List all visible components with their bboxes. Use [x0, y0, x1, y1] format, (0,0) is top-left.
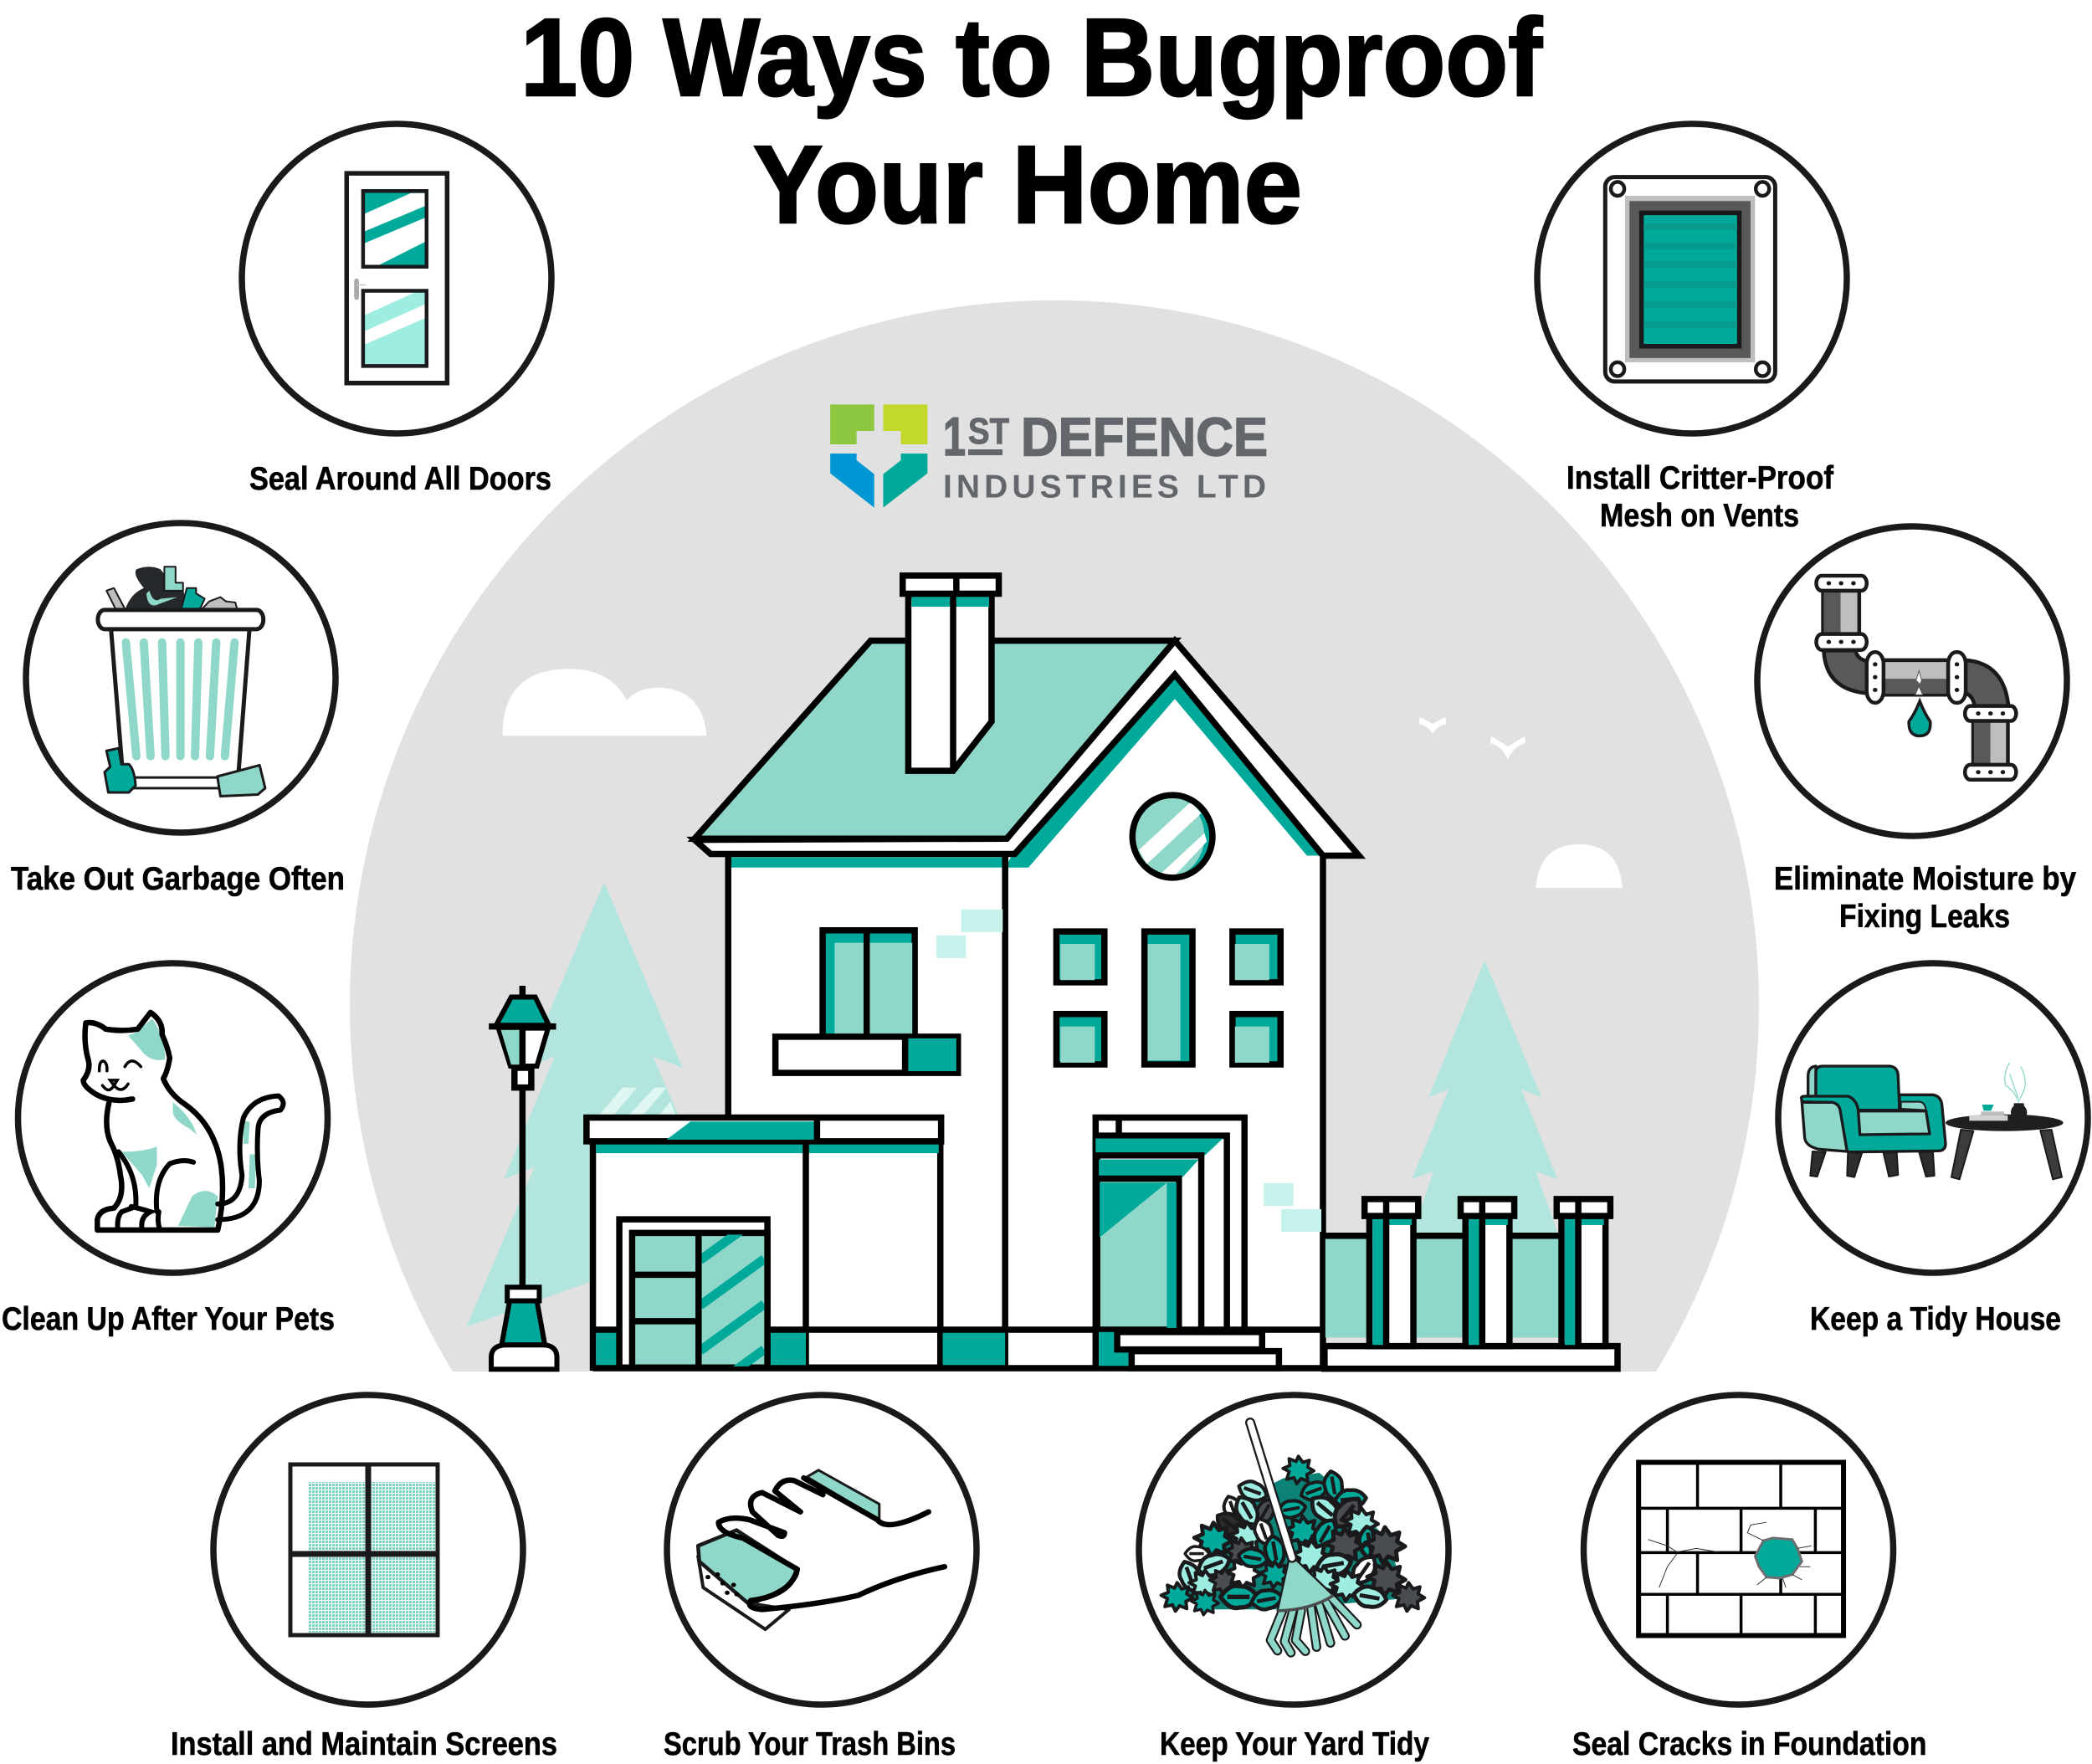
tree right [1411, 961, 1559, 1238]
sponge top [698, 1531, 797, 1604]
rake tines [1270, 1598, 1357, 1653]
icon: leaking pipe [1817, 576, 2016, 780]
armchair [1802, 1066, 1946, 1152]
logo shield mark [830, 404, 927, 508]
logo wordmark [943, 406, 1268, 505]
front door [1095, 1117, 1244, 1330]
circle [1583, 1395, 1893, 1705]
sponge side [698, 1556, 789, 1629]
roof fascia [695, 641, 1359, 855]
cat tail [218, 1096, 284, 1219]
grey semicircle backdrop [350, 300, 1759, 1372]
gable teal trim [1005, 679, 1323, 868]
circle [1139, 1395, 1449, 1705]
icon: leaf pile with rake [1161, 1423, 1424, 1653]
icon: brick wall with hole [1638, 1462, 1843, 1636]
item: install mesh on vents [1537, 124, 1847, 534]
chimney cap [903, 576, 999, 594]
bottle right [218, 765, 265, 796]
hole [1755, 1538, 1802, 1578]
cat patches [121, 1018, 256, 1228]
label: Fixing Leaks [1839, 899, 2010, 935]
item: seal around doors [242, 124, 551, 497]
bottle left [105, 748, 136, 792]
logo wordmark: ST [968, 411, 1009, 452]
can lid [98, 610, 264, 629]
label: Seal Cracks in Foundation [1572, 1726, 1926, 1762]
logo: 1st Defence Industries Ltd [830, 404, 1268, 508]
can body [111, 628, 249, 780]
circle [18, 963, 328, 1273]
label: Mesh on Vents [1600, 498, 1799, 534]
coffee table [1946, 1063, 2064, 1179]
upper right windows [1056, 931, 1280, 1064]
roof [695, 641, 1175, 838]
label: Clean Up After Your Pets [2, 1301, 335, 1337]
birds [1419, 717, 1525, 760]
icon: hand with sponge [698, 1470, 945, 1629]
fence base [1325, 1346, 1618, 1369]
base course [596, 1332, 1005, 1366]
sponge pores [708, 1575, 737, 1594]
lamp head [496, 997, 549, 1025]
house walls [728, 855, 1323, 1367]
pipe crack [1915, 671, 1923, 695]
armchair legs [1810, 1151, 1935, 1177]
front steps [1095, 1330, 1279, 1368]
label: Scrub Your Trash Bins [664, 1726, 956, 1762]
cat outline [83, 1013, 223, 1230]
label: Take Out Garbage Often [11, 861, 345, 897]
illustration: house scene [466, 576, 1623, 1396]
garage roof slab [587, 1117, 941, 1141]
eave teal trim [731, 858, 1005, 868]
cat legs [118, 1151, 193, 1230]
house body [728, 674, 1323, 1367]
circle [213, 1395, 523, 1705]
coupler bolts [1828, 583, 2003, 772]
fence post 3 [1556, 1199, 1610, 1346]
hand [719, 1478, 945, 1609]
round window [1131, 795, 1213, 878]
title: Your Home [753, 123, 1302, 246]
leaf pile [1161, 1456, 1424, 1615]
rake handle [1250, 1423, 1292, 1558]
icon: vent [1605, 177, 1775, 382]
icon: armchair and table [1802, 1063, 2064, 1179]
balcony [776, 1037, 958, 1073]
item: seal cracks in foundation [1572, 1395, 1926, 1762]
lamp post [489, 986, 556, 1369]
cat face [100, 1061, 141, 1090]
label: Seal Around All Doors [249, 461, 551, 497]
circle [26, 523, 336, 833]
can ribs [126, 643, 234, 756]
cloud right [1536, 844, 1623, 888]
pipe segments [1823, 591, 2008, 765]
water drop [1909, 701, 1930, 736]
label [1774, 861, 2076, 935]
icon: window screen [290, 1464, 438, 1635]
logo wordmark: 1 [943, 406, 966, 467]
brick joints [1638, 1462, 1843, 1636]
item: keep yard tidy [1139, 1395, 1449, 1762]
icon: door [346, 173, 447, 383]
item: scrub trash bins [664, 1395, 977, 1762]
item: keep a tidy house [1778, 963, 2088, 1337]
pipe couplers [1817, 576, 2016, 780]
circle [667, 1395, 977, 1705]
balcony window [776, 931, 958, 1073]
item: install and maintain screens [171, 1395, 557, 1762]
circle [1778, 963, 2088, 1273]
logo wordmark: INDUSTRIES LTD [943, 469, 1266, 505]
label: Install Critter-Proof [1566, 460, 1834, 496]
circle [1537, 124, 1847, 433]
cloud left [502, 669, 706, 736]
circle [1757, 526, 2067, 836]
item: clean up after pets [2, 963, 335, 1337]
fence post 2 [1460, 1199, 1515, 1346]
item: take out garbage [11, 523, 345, 897]
label [1566, 460, 1834, 534]
cracks [1648, 1522, 1812, 1587]
vent screws [1611, 182, 1769, 377]
pale brick accents [809, 910, 1321, 1295]
circle [242, 124, 551, 433]
garbage pile [106, 567, 237, 609]
icon: trash can [98, 567, 265, 796]
can foot rail [127, 777, 224, 788]
chimney [903, 576, 999, 771]
vase [2011, 1104, 2027, 1120]
logo wordmark: DEFENCE [1021, 407, 1268, 467]
tree window reflection [598, 1088, 676, 1115]
title [520, 0, 1543, 246]
garage [587, 1117, 1323, 1396]
cup [1982, 1105, 1994, 1110]
fence [1323, 1199, 1618, 1369]
second sponge piece [807, 1470, 879, 1520]
tree left [466, 882, 683, 1327]
label: Install and Maintain Screens [171, 1726, 557, 1762]
rake head [1278, 1561, 1333, 1611]
label: Keep Your Yard Tidy [1160, 1726, 1429, 1762]
icon: cat [83, 1013, 284, 1230]
garage door [619, 1219, 767, 1367]
fence post 1 [1365, 1199, 1418, 1346]
item: eliminate moisture [1757, 526, 2076, 935]
lamp base [507, 1287, 539, 1301]
plant [2005, 1063, 2025, 1103]
books [1981, 1111, 2004, 1115]
